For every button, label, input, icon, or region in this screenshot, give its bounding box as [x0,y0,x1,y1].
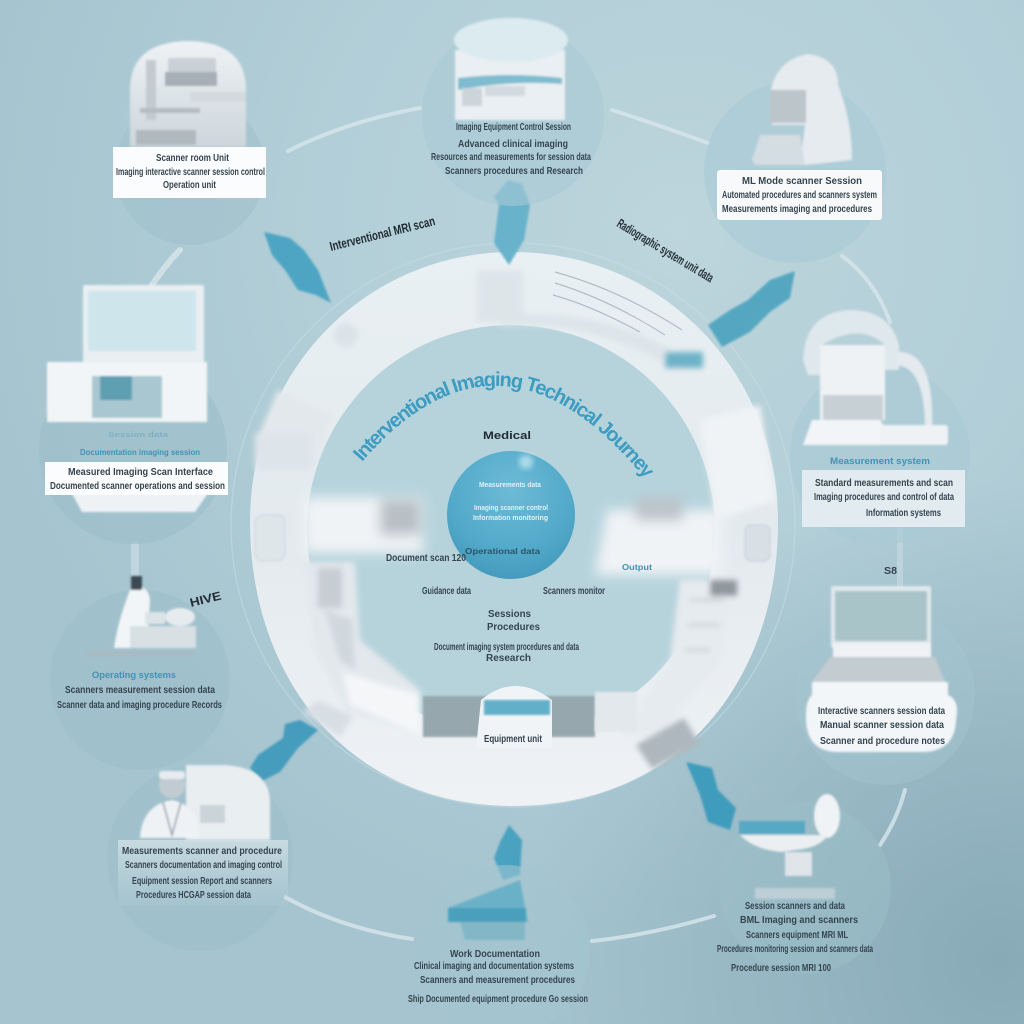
device: right inset [595,497,722,575]
arrow: upper left [264,232,331,303]
icon: microscope [86,576,196,656]
ring grey panel [636,718,700,769]
arrow: bottom [494,825,522,880]
angled caption right: Radiographic system unit data [614,216,717,285]
panel: right upper: Standard measurements and scan [815,478,953,489]
panel: top centre [422,18,604,206]
central ring [231,243,795,807]
ring inner opening [307,325,715,735]
panel: bottom right: BML Imaging and scanners [740,915,858,926]
panel: bottom left: Measurements scanner and procedure [122,846,282,857]
ring grey panel left [303,700,354,737]
label box [802,470,965,527]
device: bottom centre [423,686,637,748]
panel: bottom left: Equipment session Report and scanners [132,876,272,887]
panel: right lower: Interactive scanners session data [818,706,945,717]
panel: bottom centre: Work Documentation [450,949,540,960]
panel: top right: Automated procedures and scanners system [722,190,877,201]
icon: laptop console [806,586,957,752]
device: lower left strip [303,562,420,735]
center labels: Document imaging system procedures and data [434,642,579,653]
panel: bottom right: Procedures monitoring session and scanners data [717,944,873,955]
label box [113,147,266,198]
arrow: lower right [686,762,736,830]
center labels: Medical [483,430,531,442]
central sphere: Operational data [465,547,541,556]
label box [45,462,228,495]
arrow: top [494,180,530,265]
panel: left lower: HIVE [188,589,223,610]
panel: left lower: Scanner data and imaging procedure Records [57,700,222,711]
ring fine lines [553,272,682,335]
panel: top left: Imaging interactive scanner session control [116,167,265,178]
icon: imaging unit [454,18,568,120]
panel: bottom centre [408,865,590,1024]
connecting arcs [135,108,905,941]
label band [118,840,288,906]
panel: top centre: Scanners procedures and Research [445,166,583,177]
panel: bottom right: Scanners equipment MRI ML [746,930,848,941]
panel: left upper: Session data [108,432,168,439]
panel: left lower [50,576,230,770]
panel: top centre: Advanced clinical imaging [458,139,568,150]
center labels: Sessions [488,609,531,620]
panel: top right: ML Mode scanner Session [742,176,862,187]
central sphere: Information monitoring [473,515,548,522]
center labels: Research [486,653,531,664]
panel: left upper [39,285,228,544]
panel: right upper: Measurement system [830,456,930,466]
panel: right lower: Manual scanner session data [820,720,944,731]
panel: left lower: Operating systems [92,670,176,680]
panel: top centre: Resources and measurements for session data [431,152,591,163]
panel: top left: Operation unit [163,180,217,191]
panel: bottom left: Scanners documentation and imaging control [125,860,282,871]
panel: bottom centre: Scanners and measurement procedures [420,975,575,986]
icon: computer console [47,285,210,512]
center labels: Procedures [487,622,540,633]
panel: bottom centre: Clinical imaging and documentation systems [414,961,574,972]
curved heading path [362,386,654,490]
panel: bottom left: Procedures HCGAP session data [136,890,251,901]
panel: left upper: Documented scanner operations and session [50,481,225,492]
device: lower right strip [620,580,737,735]
panel: top right [704,54,886,263]
center labels: Document scan 120 [386,553,466,564]
ring body [250,252,778,806]
center labels: Equipment unit [484,734,543,745]
icon: imaging workstation [803,310,948,445]
panel: left upper: Documentation imaging session [80,448,200,457]
icon: patient chair [739,794,840,899]
center labels: Scanners monitor [543,586,605,597]
curved heading: Interventional Imaging Technical Journey [352,371,654,476]
panel: bottom right [717,794,891,974]
center labels [386,430,652,745]
panel: right upper: Imaging procedures and control of data [814,492,954,503]
device: left inset [303,497,423,553]
device: round port left [255,515,285,561]
panel: right upper [790,310,970,545]
icon: technician [140,765,270,840]
icon: scanner head [752,54,852,165]
center labels: Guidance data [422,586,471,597]
panel: right lower: Scanner and procedure notes [820,736,945,747]
panel: bottom centre: Ship Documented equipment procedure Go session [408,994,588,1005]
panel: left lower: Scanners measurement session data [65,685,215,696]
panel: bottom left [107,765,293,951]
central sphere: Measurements data [479,482,541,489]
icon: imaging table [448,880,528,940]
panel: top left: Scanner room Unit [156,153,230,164]
label box [717,170,882,220]
panel: bottom right: Procedure session MRI 100 [731,963,831,974]
arrow: upper right [708,271,795,347]
panel: top right: Measurements imaging and procedures [722,204,872,215]
panel: top left [113,41,266,245]
ring shading segments [255,271,775,520]
panel: right upper: Information systems [866,508,941,519]
device: round port right [745,525,770,561]
panel: left upper: Measured Imaging Scan Interface [68,467,213,478]
angled caption left: Interventional MRI scan [328,213,437,254]
panel: right lower: S8 [884,566,897,577]
icon: dome scanner [130,41,246,147]
center labels: Output [622,563,652,572]
central sphere: Imaging scanner control [474,505,548,512]
arrow: lower left [250,720,318,781]
central sphere [447,451,575,579]
panel: right lower [795,566,975,785]
panel: top centre: Imaging Equipment Control Session [456,122,571,133]
panel: bottom right: Session scanners and data [745,901,845,912]
